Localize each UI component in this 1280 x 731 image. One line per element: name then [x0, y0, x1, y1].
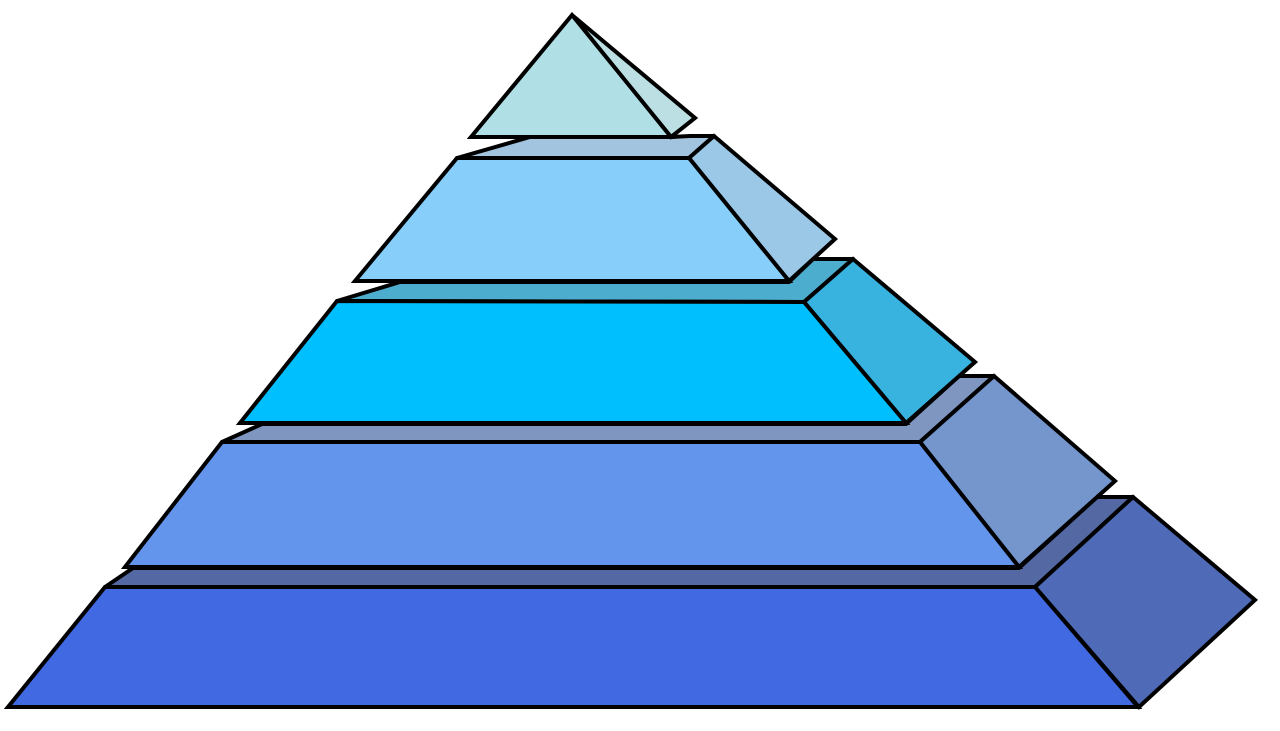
tier 5: bottom layer: [8, 497, 1255, 707]
cap side face: [572, 15, 695, 137]
cap front face: [471, 15, 671, 137]
tier 4 front face: [125, 442, 1019, 567]
tier 5 top shelf: [105, 497, 1133, 587]
tier 5 front face: [8, 587, 1138, 707]
tier 1: pyramid cap: [471, 15, 695, 137]
tier 2 front face: [355, 158, 789, 281]
tier 3 side face: [804, 259, 975, 423]
tier 2: upper middle layer: [355, 136, 835, 281]
tier 3: middle layer: [240, 259, 975, 423]
tier 2 top shelf: [457, 136, 714, 158]
tier 4 top shelf: [222, 376, 994, 442]
tier 3 top shelf: [337, 259, 853, 302]
tier 4 side face: [920, 376, 1115, 567]
tier 3 front face: [240, 301, 906, 423]
tier 5 side face: [1035, 497, 1255, 707]
tier 4: lower middle layer: [125, 376, 1115, 567]
tier 2 side face: [689, 136, 835, 281]
